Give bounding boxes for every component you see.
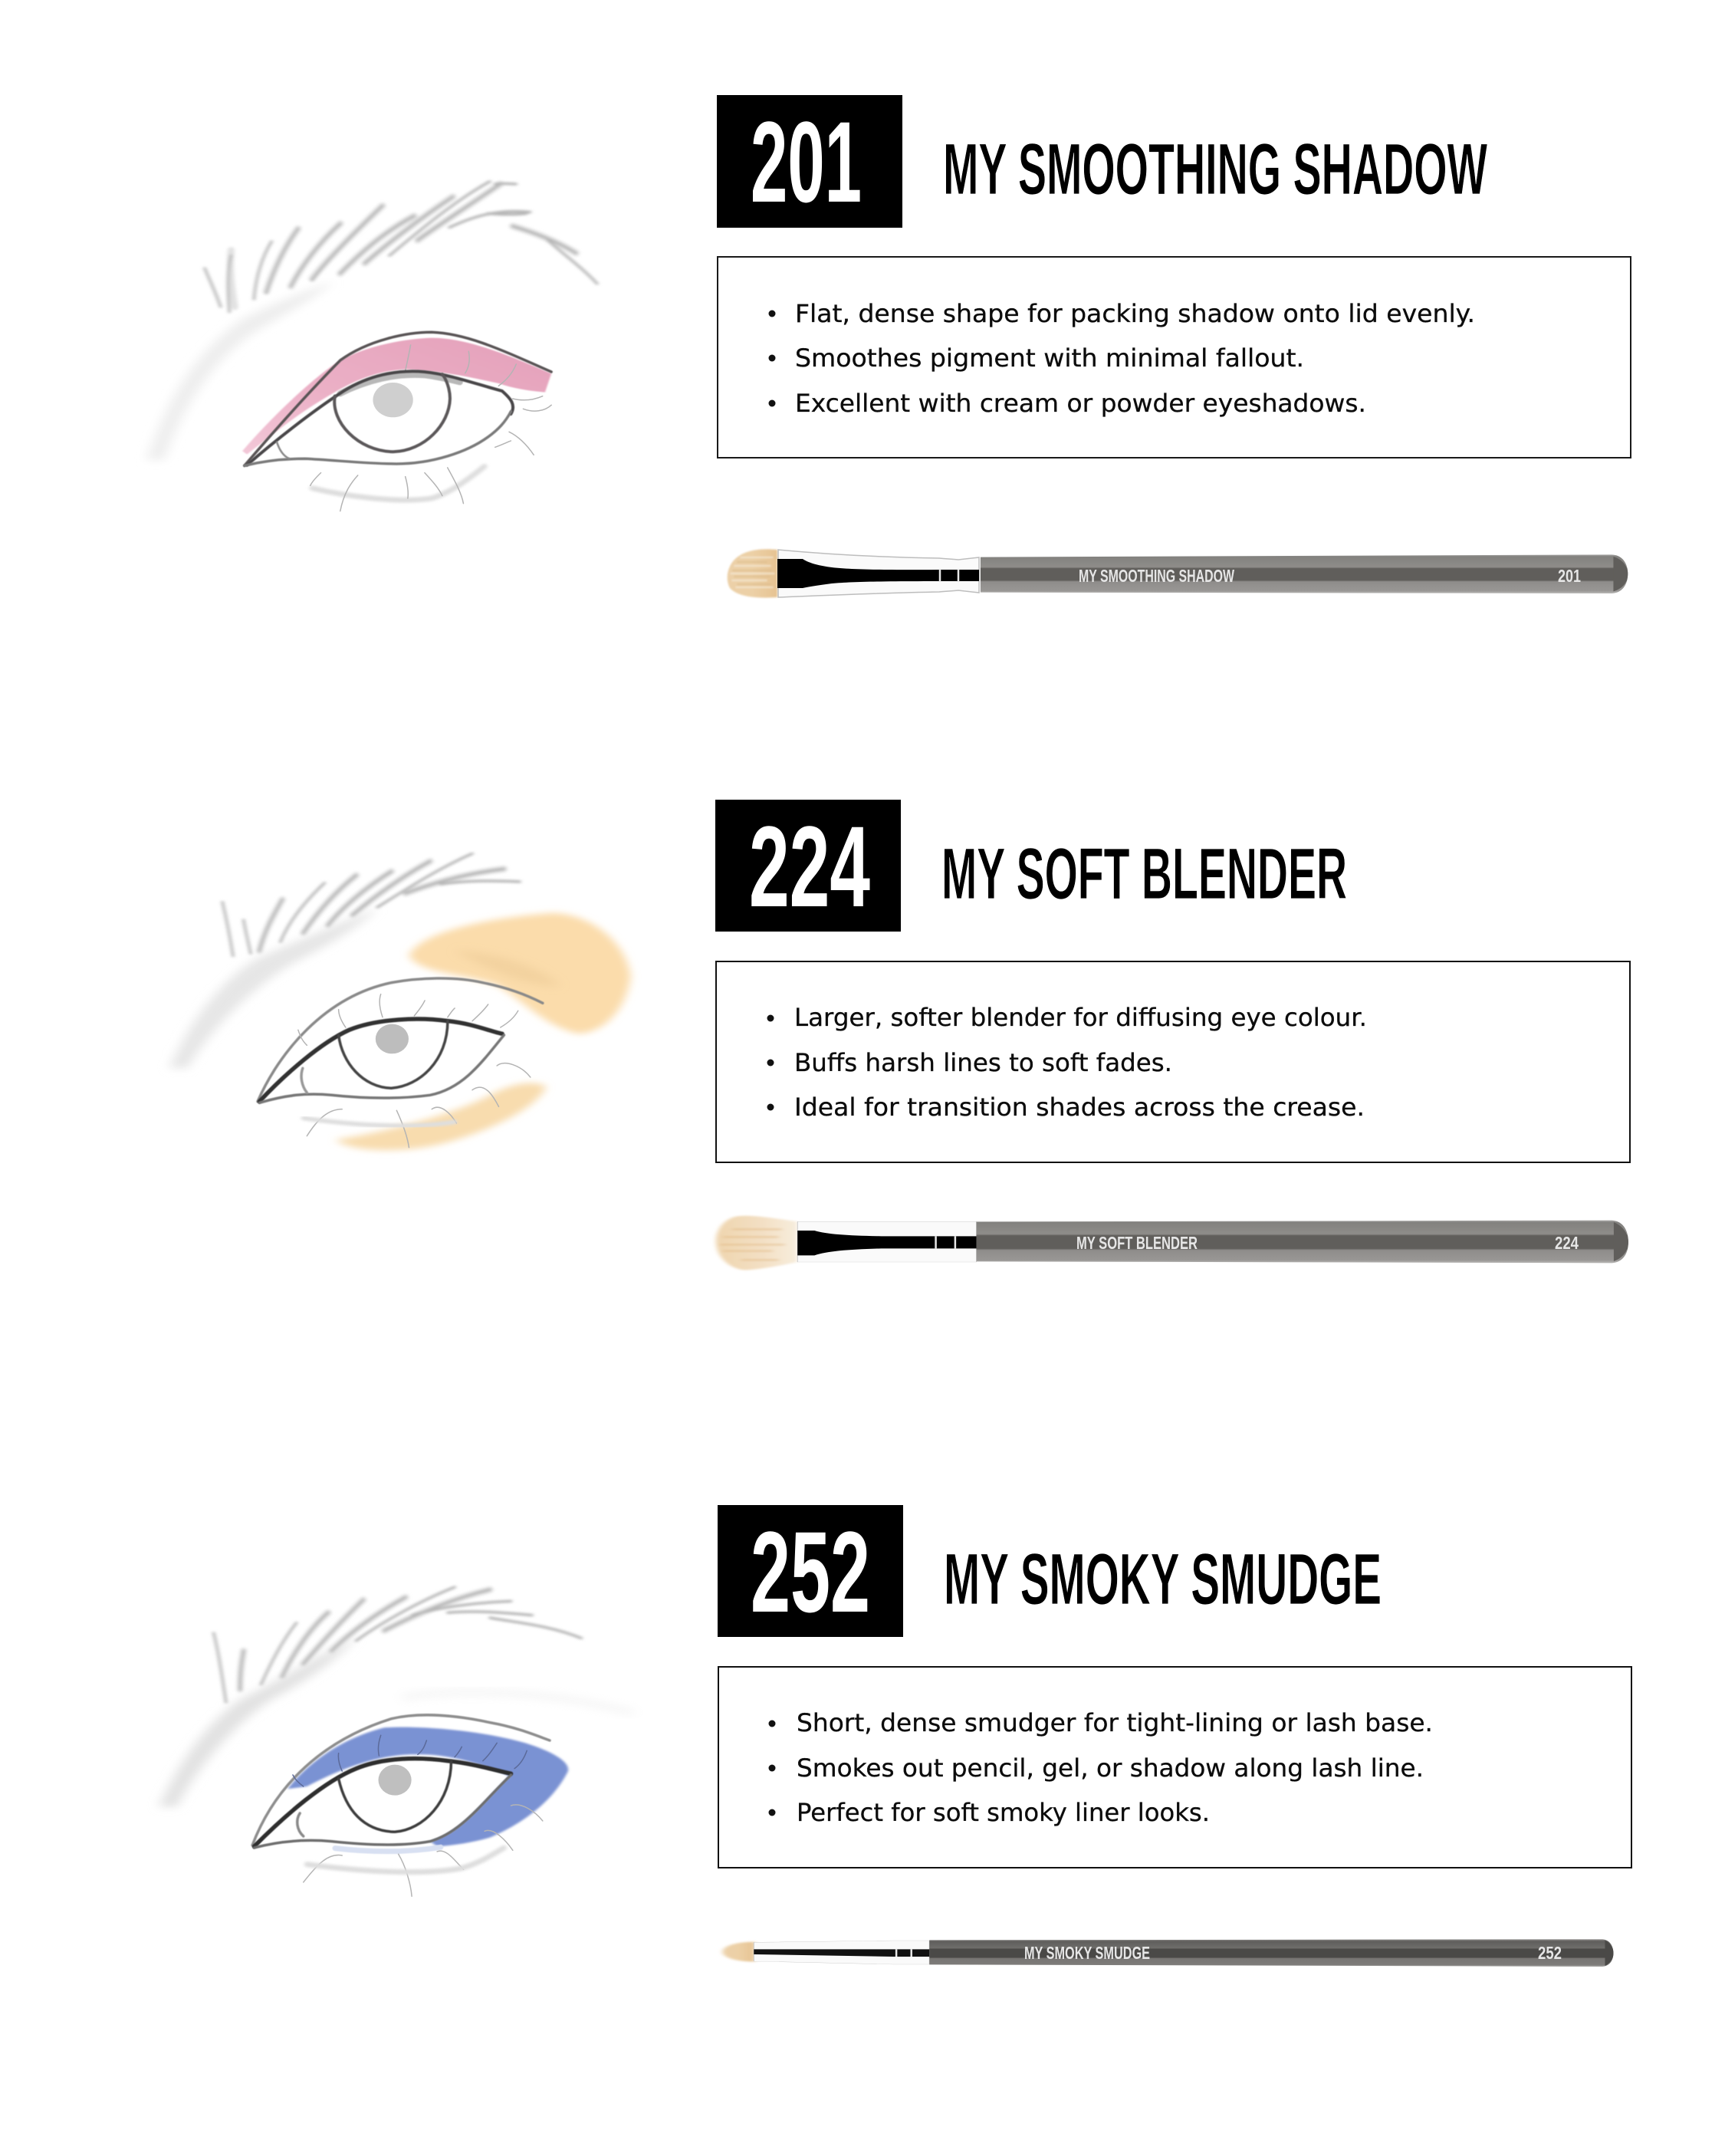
feature list panel: Excellent with cream or powder eyeshadows. — [795, 389, 1366, 418]
lower lid — [259, 1035, 504, 1103]
pupil — [378, 1765, 412, 1796]
upper lash line — [254, 1759, 511, 1846]
bristles — [728, 549, 777, 598]
brush label: MY SMOOTHING SHADOW — [1079, 566, 1234, 586]
section: 252 My Smoky Smudge — [159, 1505, 1631, 1967]
eyebrow hairs — [222, 853, 520, 956]
under-eye shading — [312, 466, 485, 500]
brush 201: 201 — [1558, 566, 1581, 586]
feature list panel — [716, 961, 1630, 1162]
brush 224 — [716, 1216, 1628, 1270]
eye illustration with peach blend — [169, 853, 631, 1150]
lower lashes — [304, 1805, 543, 1896]
brush 252 — [723, 1939, 1613, 1967]
peach shadow under eye — [335, 1083, 546, 1150]
iris — [339, 1761, 452, 1832]
title: MY SMOKY SMUDGE — [944, 1539, 1382, 1620]
ferrule — [778, 550, 979, 597]
brush 201 — [728, 549, 1628, 598]
lower lashes — [310, 396, 551, 511]
eye illustration with blue smoky shadow — [159, 1587, 631, 1896]
eyebrow hairs — [205, 182, 597, 312]
lid creases — [406, 345, 516, 386]
pink eyeshadow on lid — [242, 338, 551, 455]
number badge: 201 — [751, 97, 862, 226]
feature list panel: Flat, dense shape for packing shadow onto lid evenly. — [795, 299, 1475, 328]
feature list panel: Short, dense smudger for tight-lining or lash base. — [797, 1708, 1433, 1737]
feature list panel: Ideal for transition shades across the crease. — [794, 1093, 1365, 1122]
ferrule — [797, 1221, 977, 1262]
feature list panel: Smoothes pigment with minimal fallout. — [795, 343, 1304, 373]
brush 252: 252 — [1538, 1943, 1562, 1963]
number badge — [717, 95, 902, 228]
brow bone shading — [159, 1635, 356, 1807]
lashes — [293, 1735, 527, 1786]
number badge: 224 — [749, 802, 870, 931]
upper lash line — [259, 1019, 502, 1102]
ferrule — [754, 1941, 929, 1964]
tear duct — [277, 442, 289, 458]
upper crease outline — [258, 978, 543, 1102]
upper crease outline — [245, 332, 551, 465]
section: 201 My Smoothing Shadow — [146, 95, 1631, 598]
feature list panel — [718, 1667, 1631, 1868]
under-eye shading — [307, 1848, 504, 1872]
blue eyeshadow — [288, 1727, 568, 1846]
tear duct — [297, 1813, 304, 1836]
section: 224 My Soft Blender — [169, 800, 1630, 1270]
handle — [981, 554, 1628, 593]
bristles — [723, 1942, 755, 1962]
number badge: 252 — [751, 1507, 870, 1636]
title: MY SOFT BLENDER — [941, 833, 1347, 915]
upper lash line — [247, 371, 513, 465]
brush label: MY SMOKY SMUDGE — [1024, 1943, 1150, 1963]
feature list panel: Buffs harsh lines to soft fades. — [794, 1048, 1172, 1077]
feature list panel: Smokes out pencil, gel, or shadow along lash line. — [797, 1753, 1424, 1783]
number badge — [715, 800, 901, 932]
forehead crease shading — [406, 1692, 631, 1712]
eyebrow hairs — [214, 1587, 581, 1702]
handle — [929, 1939, 1613, 1967]
feature list panel: Perfect for soft smoky liner looks. — [797, 1798, 1210, 1827]
lashes — [298, 994, 531, 1148]
feature list panel — [718, 257, 1631, 458]
feature list panel: Larger, softer blender for diffusing eye colour. — [794, 1003, 1367, 1032]
upper crease outline — [252, 1715, 550, 1845]
pupil — [373, 383, 413, 417]
iris — [334, 374, 450, 452]
eye illustration with pink lid shadow — [146, 182, 597, 511]
ferrule black reflection — [777, 559, 979, 588]
bristles — [716, 1216, 797, 1270]
brush 224: 224 — [1555, 1233, 1579, 1253]
tear duct — [301, 1068, 307, 1093]
under-eye shading — [304, 1118, 455, 1126]
pale blue under-lid fade — [335, 1847, 441, 1852]
brow bone shading — [146, 281, 334, 460]
lower lid — [245, 412, 511, 465]
iris — [339, 1021, 448, 1088]
pupil — [376, 1024, 409, 1053]
brow bone shading — [169, 907, 377, 1068]
peach shadow on crease — [409, 913, 631, 1034]
handle — [977, 1221, 1628, 1263]
number badge — [718, 1505, 903, 1637]
lash line shadow — [340, 375, 460, 393]
brush label: MY SOFT BLENDER — [1076, 1233, 1198, 1253]
lower lid — [254, 1775, 511, 1848]
